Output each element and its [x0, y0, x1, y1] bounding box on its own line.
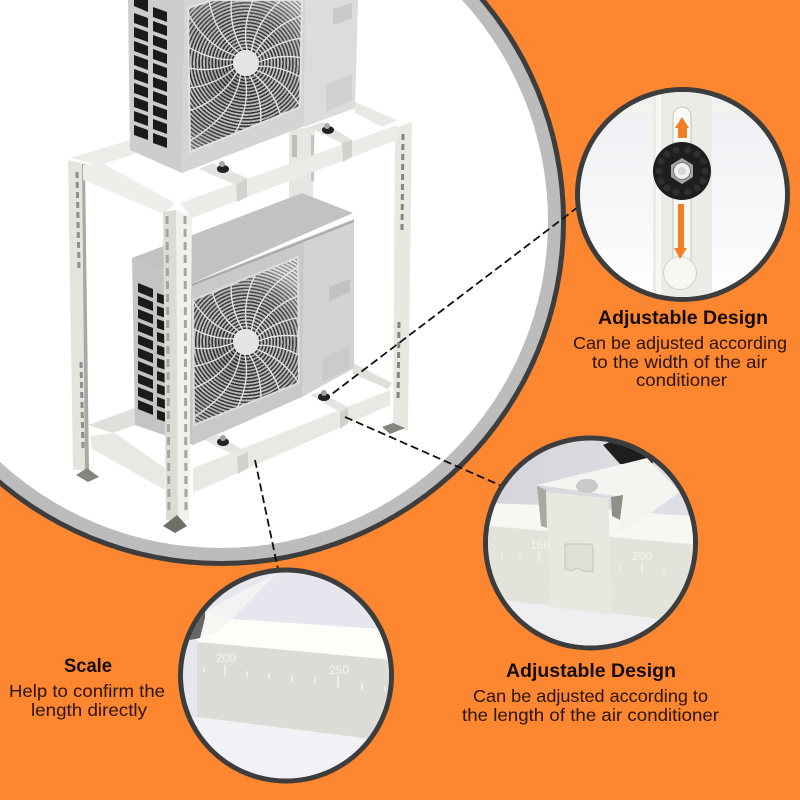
white top face of the bar	[489, 504, 693, 544]
scale markings: 150	[530, 538, 550, 552]
arrow: up	[675, 117, 689, 138]
detail circle: length adjustment clip: 200	[632, 549, 652, 563]
bar front face	[488, 526, 693, 619]
lower frame rear bars	[88, 363, 392, 433]
front post	[163, 210, 192, 533]
screw head	[576, 479, 598, 493]
lower front bars	[90, 390, 390, 493]
upper crossbars and brackets	[199, 122, 352, 202]
slotted strip	[653, 85, 712, 305]
text: scale: Help to confirm the	[9, 681, 165, 701]
detail circle: scale	[175, 565, 400, 790]
text: adjustable design width: to the width of the air	[592, 352, 767, 372]
detail circle: length adjustment clip	[483, 436, 698, 650]
dashed leader lines	[255, 207, 578, 574]
white top face of the bar	[197, 619, 395, 662]
text: adjustable design width: conditioner	[636, 370, 727, 390]
scale numbers and ticks: 200	[216, 651, 236, 665]
text: adjustable design width: Can be adjusted according	[573, 333, 787, 353]
text: scale: Scale	[64, 655, 112, 677]
rack and two outdoor units	[68, 0, 412, 533]
detail circle: width adjustment slot	[570, 85, 795, 305]
upper unit	[128, 0, 358, 173]
rear middle post	[289, 126, 315, 200]
bracket corner	[190, 612, 205, 640]
text: scale	[9, 655, 165, 720]
sliding bracket	[538, 458, 680, 513]
lower unit	[132, 193, 354, 445]
rubber foot behind bracket	[603, 442, 653, 464]
plate cutout	[565, 544, 593, 572]
bar front face	[197, 642, 395, 742]
main product circle	[0, 0, 566, 566]
text: adjustable design width	[573, 307, 787, 390]
arrow: down	[674, 204, 687, 259]
text: adjustable design length: Can be adjusted according to	[473, 686, 708, 706]
text: adjustable design length	[462, 660, 719, 725]
rubber foot with bolt	[653, 142, 711, 200]
detail circle: scale: 250	[329, 663, 349, 677]
text: adjustable design width: Adjustable Design	[598, 307, 768, 329]
text: adjustable design length: the length of the air conditioner	[462, 705, 719, 725]
upper frame rear bars	[70, 102, 397, 165]
upper front bars	[83, 125, 397, 218]
text: adjustable design length: Adjustable Design	[506, 660, 676, 682]
area below the bar	[192, 717, 368, 778]
clip plate	[546, 492, 613, 615]
text: scale: length directly	[31, 700, 147, 720]
lower crossbars and brackets	[205, 390, 348, 457]
rear posts	[68, 122, 412, 482]
